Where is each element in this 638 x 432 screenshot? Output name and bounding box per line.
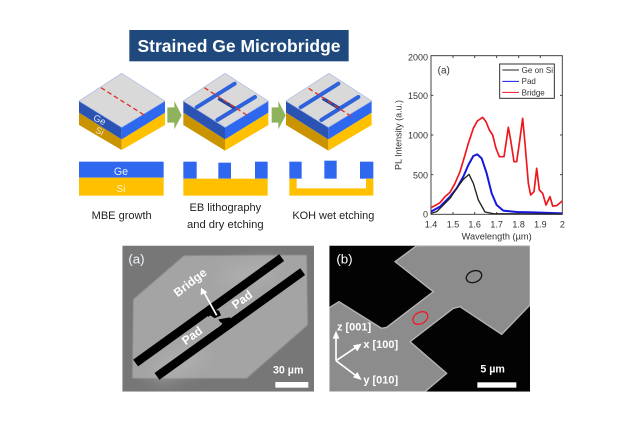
microbridge shape bbox=[329, 246, 530, 392]
y tick labels: 0 bbox=[423, 210, 428, 220]
SEM labels: 30 µm bbox=[273, 364, 303, 376]
arrow 2 bbox=[272, 101, 286, 129]
cross-section: MBE growth bbox=[79, 162, 164, 196]
scale bar bbox=[275, 382, 308, 388]
scale bar bbox=[477, 382, 516, 388]
axes labels and tags: (b) bbox=[336, 251, 353, 266]
arrow: bridge bbox=[201, 288, 217, 315]
cross-section: MBE growth: Ge bbox=[114, 166, 128, 178]
x tick labels bbox=[425, 219, 565, 229]
label: EB lithography and dry etching bbox=[187, 202, 264, 231]
substrate bbox=[122, 246, 314, 392]
plot frame and ticks bbox=[431, 56, 562, 214]
SEM labels: Pad bbox=[229, 288, 255, 312]
y tick labels: 2000 bbox=[408, 52, 428, 62]
pad curve bbox=[431, 154, 562, 213]
dark background bbox=[329, 246, 530, 392]
block: EB lithography bbox=[183, 73, 268, 151]
SEM labels: Bridge bbox=[171, 265, 210, 300]
label: KOH wet etching: KOH wet etching bbox=[292, 210, 374, 222]
axes labels and tags: y [010] bbox=[363, 375, 398, 387]
bridge curve bbox=[431, 117, 562, 208]
x axis title: Wavelength (µm) bbox=[462, 231, 532, 241]
crystal axes bbox=[336, 334, 359, 378]
membrane highlights bbox=[150, 268, 258, 385]
SEM image (a) bbox=[122, 246, 314, 392]
legend: Bridge bbox=[522, 88, 545, 97]
cross-section: MBE growth: Si bbox=[117, 184, 125, 195]
slits bbox=[136, 258, 303, 376]
y tick labels bbox=[408, 52, 428, 220]
PL spectrum chart bbox=[394, 52, 565, 241]
axes labels and tags: z [001] bbox=[337, 321, 372, 333]
etched membrane bbox=[132, 255, 308, 378]
red measurement spot bbox=[411, 309, 430, 327]
label: EB lithography and dry etching: and dry etching bbox=[187, 219, 264, 231]
axes arrowheads bbox=[333, 331, 362, 380]
cross-section: KOH etching bbox=[289, 161, 373, 196]
x tick labels: 2 bbox=[560, 219, 565, 229]
arrow 1 bbox=[167, 101, 182, 129]
process diagram panel bbox=[79, 30, 374, 231]
SEM labels: Pad bbox=[179, 324, 205, 348]
x tick labels: 1.4 bbox=[425, 219, 437, 229]
title: Strained Ge Microbridge bbox=[137, 36, 341, 56]
y axis title: PL Intensity (a.u.) bbox=[394, 100, 404, 170]
block: KOH etching bbox=[286, 73, 372, 151]
y tick labels: 1000 bbox=[408, 131, 428, 141]
legend bbox=[500, 64, 554, 98]
black measurement spot bbox=[464, 268, 484, 285]
x tick labels: 1.7 bbox=[490, 219, 503, 229]
SEM labels: (a) bbox=[128, 251, 145, 266]
title bbox=[129, 30, 349, 61]
bridge notches bbox=[208, 310, 230, 325]
legend: Pad bbox=[522, 77, 536, 86]
block: MBE growth: Si bbox=[94, 125, 105, 138]
y tick labels: 1500 bbox=[408, 91, 428, 101]
cross-section: EB lithography bbox=[183, 162, 268, 196]
legend: Ge on Si bbox=[522, 66, 553, 75]
label: MBE growth: MBE growth bbox=[92, 210, 152, 222]
axes labels and tags: 5 µm bbox=[480, 364, 505, 376]
bridge neck bbox=[208, 315, 222, 328]
block: MBE growth: Ge bbox=[92, 113, 107, 127]
x tick labels: 1.9 bbox=[534, 219, 547, 229]
block: MBE growth bbox=[79, 73, 165, 150]
y tick labels: 500 bbox=[413, 170, 428, 180]
Ge on Si curve bbox=[431, 174, 562, 214]
x tick labels: 1.6 bbox=[468, 219, 481, 229]
SEM labels bbox=[128, 251, 303, 376]
axes labels and tags bbox=[336, 251, 505, 387]
x tick labels: 1.5 bbox=[447, 219, 459, 229]
panel tag: (a) bbox=[438, 65, 450, 76]
SEM image (b) bbox=[329, 246, 530, 392]
x tick labels: 1.8 bbox=[512, 219, 525, 229]
axes labels and tags: x [100] bbox=[363, 339, 398, 351]
label: EB lithography and dry etching: EB lithography bbox=[189, 202, 261, 214]
